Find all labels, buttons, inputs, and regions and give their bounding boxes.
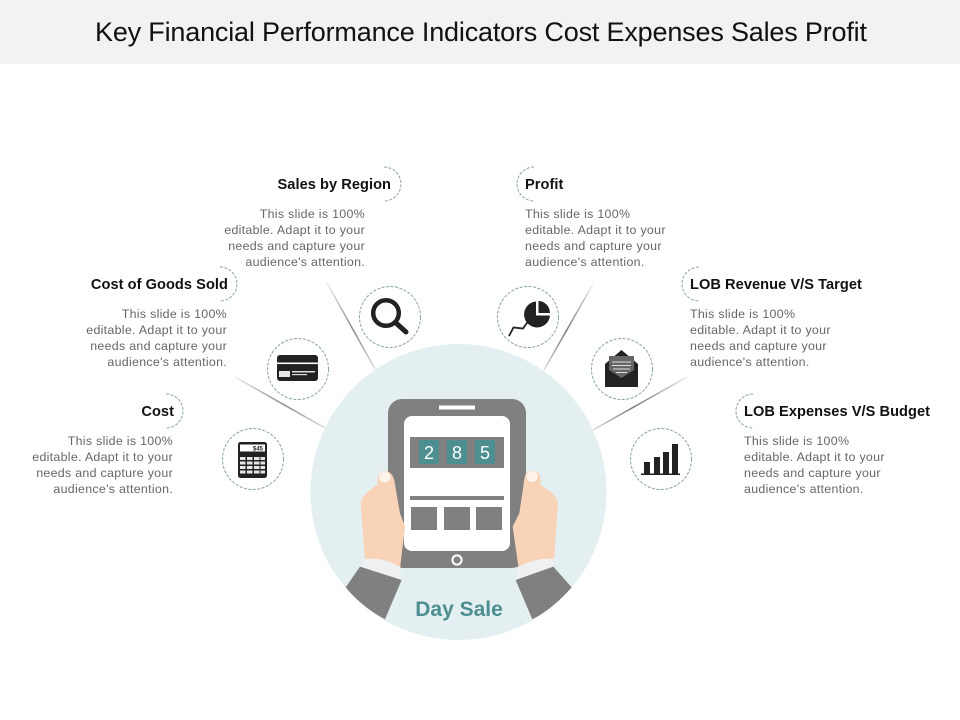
text block: Cost: This slide is 100% (68, 434, 173, 448)
label: Day Sale: Day Sale (415, 598, 503, 621)
text block: LOB Revenue V/S Target: This slide is 100% (690, 307, 795, 321)
icon: open envelope (592, 338, 652, 400)
text block: Cost: needs and capture your (36, 466, 173, 480)
icon: credit card (268, 338, 328, 400)
text block: LOB Revenue V/S Target: editable. Adapt it to your (690, 323, 831, 337)
header band (0, 0, 960, 64)
text block: Sales by Region: needs and capture your (228, 239, 365, 253)
connector lines (235, 283, 687, 430)
text block: Sales by Region: editable. Adapt it to your (224, 223, 365, 237)
icon: pie and line chart (498, 286, 558, 348)
text block: LOB Expenses V/S Budget: editable. Adapt it to your (744, 450, 885, 464)
left hand (346, 471, 405, 619)
text block: Profit: editable. Adapt it to your (525, 223, 666, 237)
tablet (388, 399, 526, 568)
text block: Cost: editable. Adapt it to your (32, 450, 173, 464)
text block: LOB Expenses V/S Budget (736, 394, 930, 496)
text block: Profit: audience's attention. (525, 255, 645, 269)
text block: LOB Revenue V/S Target: needs and capture your (690, 339, 827, 353)
tablet: 5 (480, 443, 490, 463)
icon: magnifying glass (360, 286, 420, 348)
text block: LOB Revenue V/S Target: audience's attention. (690, 355, 810, 369)
text block: Cost of Goods Sold: needs and capture your (90, 339, 227, 353)
tablet: 2 (424, 443, 434, 463)
panel: central circle illustration (310, 344, 606, 640)
text block: Profit: needs and capture your (525, 239, 662, 253)
text block: Cost of Goods Sold: This slide is 100% (122, 307, 227, 321)
text block: LOB Expenses V/S Budget: audience's attention. (744, 482, 864, 496)
right hand (513, 470, 572, 619)
tablet: 8 (452, 443, 462, 463)
text block: Cost of Goods Sold: audience's attention. (107, 355, 227, 369)
text block: LOB Revenue V/S Target (682, 267, 862, 369)
icon: calculator: $45 (253, 446, 264, 452)
text block: Cost of Goods Sold: Cost of Goods Sold (91, 277, 228, 293)
text block: Sales by Region (224, 167, 401, 269)
icon: bar chart (630, 428, 692, 490)
text block: Cost: Cost (141, 404, 174, 420)
text block: LOB Expenses V/S Budget: This slide is 100% (744, 434, 849, 448)
text block: LOB Expenses V/S Budget: LOB Expenses V/S Budget (744, 404, 930, 420)
text block: Profit (517, 167, 666, 269)
icon: calculator (222, 428, 284, 490)
text block: Profit: Profit (525, 177, 563, 193)
text block: Sales by Region: audience's attention. (245, 255, 365, 269)
text block: Profit: This slide is 100% (525, 207, 630, 221)
text block: Cost of Goods Sold (86, 267, 237, 369)
text block: LOB Revenue V/S Target: LOB Revenue V/S Target (690, 277, 862, 293)
text block: Cost of Goods Sold: editable. Adapt it to your (86, 323, 227, 337)
text block: Cost (32, 394, 183, 496)
text block: LOB Expenses V/S Budget: needs and capture your (744, 466, 881, 480)
title: Key Financial Performance Indicators Cost Expenses Sales Profit (95, 17, 867, 47)
text block: Sales by Region: Sales by Region (278, 177, 391, 193)
text block: Sales by Region: This slide is 100% (260, 207, 365, 221)
text block: Cost: audience's attention. (53, 482, 173, 496)
